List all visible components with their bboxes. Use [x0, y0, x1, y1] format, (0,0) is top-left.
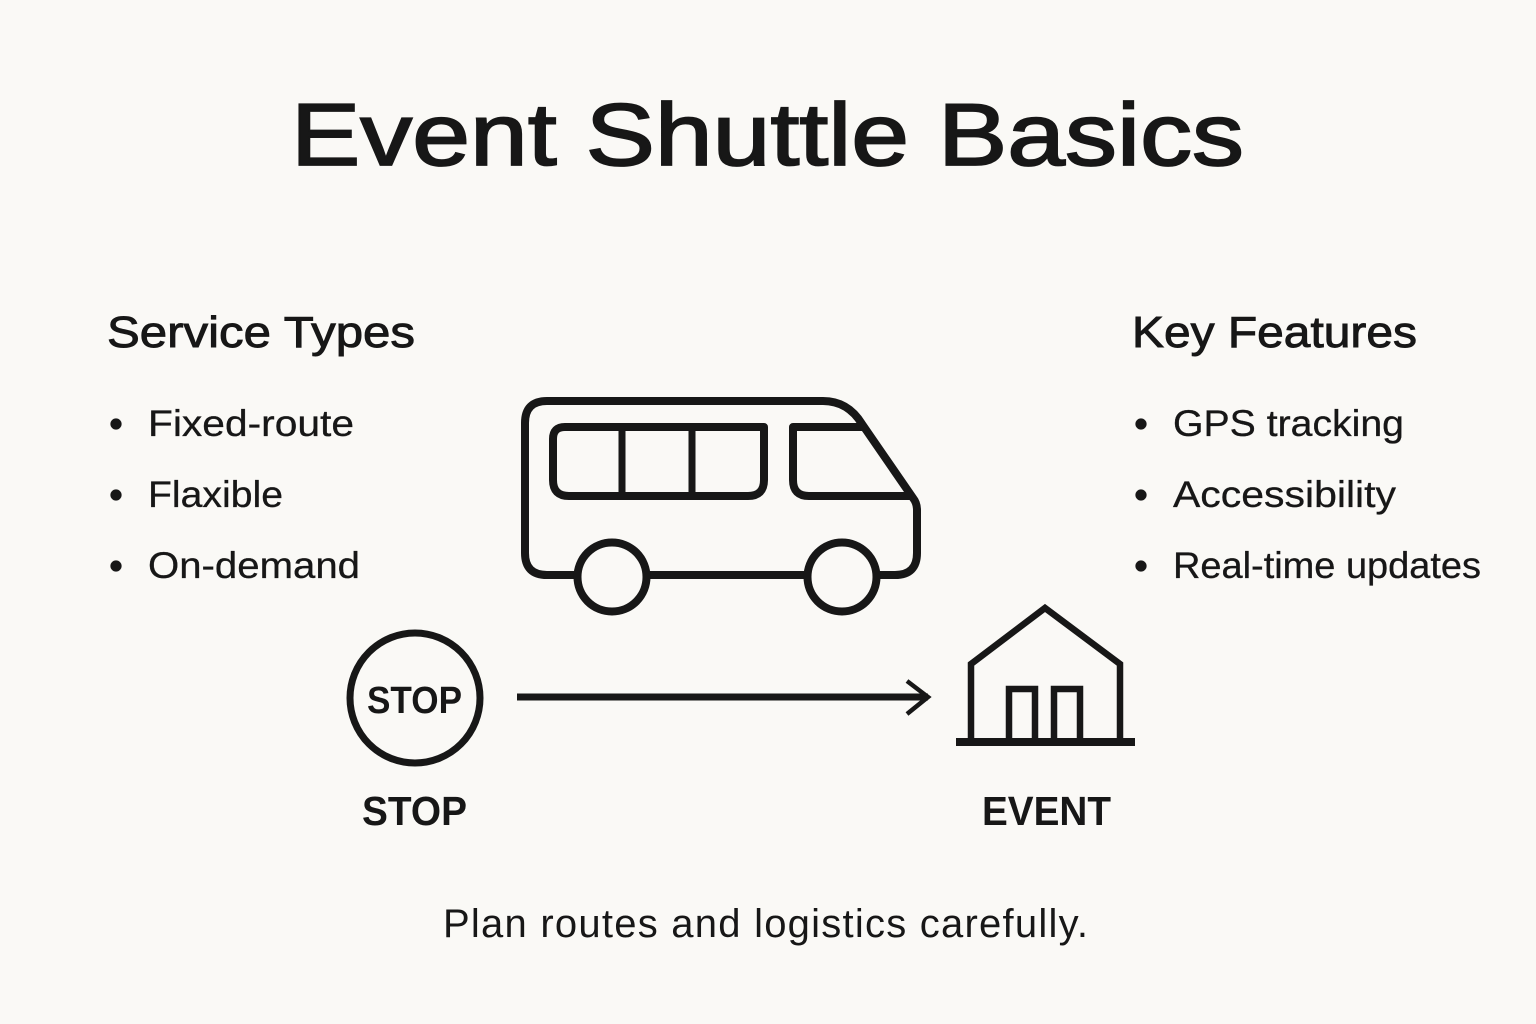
label: stop: STOP	[362, 788, 467, 834]
list: key features: Real-time updates	[1173, 545, 1481, 586]
list: key features: Accessibility	[1173, 474, 1397, 515]
panel: service types	[107, 308, 415, 586]
panel: key features	[1132, 308, 1481, 586]
list: service types: On-demand	[148, 545, 360, 586]
heading: key features: Key Features	[1132, 308, 1417, 357]
footer note: Plan routes and logistics carefully.	[443, 902, 1088, 946]
list: service types: Flaxible	[148, 474, 283, 515]
list: service types: Fixed-route	[148, 403, 354, 444]
list: key features: GPS tracking	[1173, 403, 1404, 444]
icon: stop sign	[350, 633, 480, 763]
title: Event Shuttle Basics	[291, 85, 1244, 184]
icon: shuttle bus	[525, 401, 917, 612]
icon: event building	[956, 608, 1135, 742]
heading: service types: Service Types	[107, 308, 415, 357]
label: event: EVENT	[982, 788, 1111, 834]
list: service types	[110, 403, 360, 586]
list: key features	[1136, 403, 1481, 586]
arrow: stop to event	[517, 681, 928, 714]
icon: stop sign: STOP	[367, 680, 462, 722]
